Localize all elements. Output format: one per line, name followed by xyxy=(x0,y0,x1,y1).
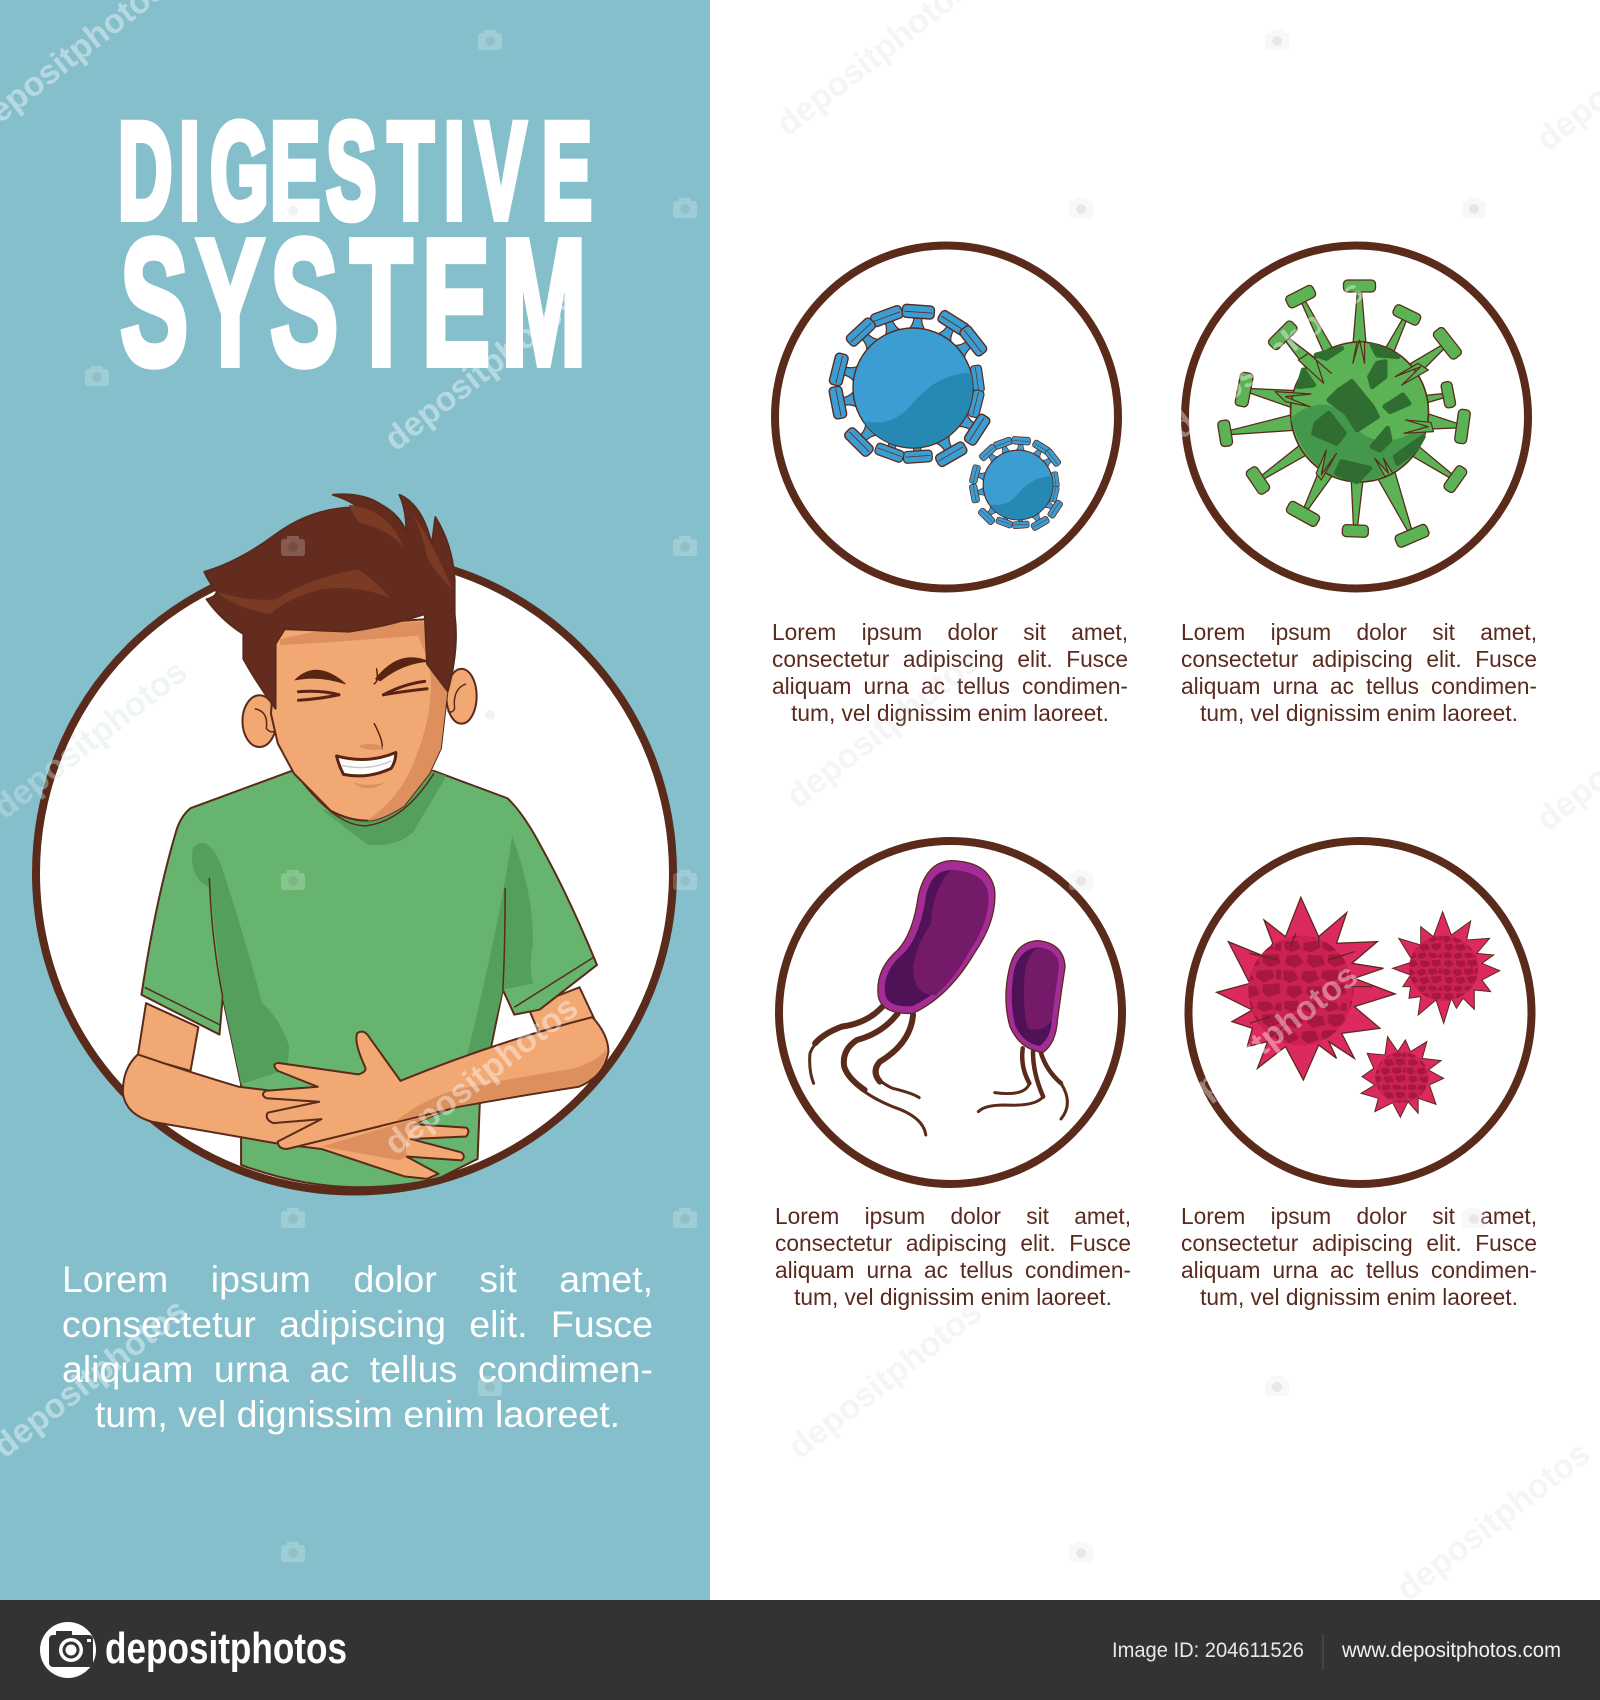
text block: purple bacteria: aliquam urna ac tellus condimen- xyxy=(775,1257,1131,1283)
illustration: man with stomach ache in circle xyxy=(36,494,673,1192)
shirt shadows xyxy=(192,771,534,1087)
icon: flagella xyxy=(810,1007,1067,1135)
lower hand shading xyxy=(321,1108,452,1160)
right arm with upper hand xyxy=(263,1017,608,1149)
text block: main lorem ipsum: tum, vel dignissim enim laoreet. xyxy=(95,1393,620,1435)
watermark overlay: depositphotos xyxy=(1163,272,1371,446)
title: digestive system: SYSTEM xyxy=(120,202,587,404)
watermark overlay: depositphotos xyxy=(779,641,987,815)
watermark overlay: depositphotos xyxy=(1157,956,1365,1130)
text block: purple bacteria xyxy=(775,1203,1131,1310)
icon: footer logo camera xyxy=(40,1622,96,1678)
icon: large red virus xyxy=(1217,897,1395,1080)
watermark cameras on white xyxy=(1069,30,1486,1562)
arm shading xyxy=(395,1049,607,1122)
text block: red virus: consectetur adipiscing elit. Fusce xyxy=(1181,1230,1537,1256)
text block: blue virus: aliquam urna ac tellus condimen- xyxy=(772,673,1128,699)
teeth xyxy=(337,752,396,776)
watermark overlay: depositphotos xyxy=(377,284,585,458)
text block: purple bacteria: consectetur adipiscing elit. Fusce xyxy=(775,1230,1131,1256)
panel: red virus circle xyxy=(1188,841,1532,1184)
icon: medium red virus xyxy=(1393,912,1500,1023)
title: digestive system xyxy=(118,95,592,404)
text block: red virus: tum, vel dignissim enim laoreet. xyxy=(1200,1284,1518,1310)
icon: large bacterium xyxy=(878,861,995,1013)
left arm with lower hand xyxy=(123,1054,468,1179)
hair xyxy=(204,494,456,709)
upper arms xyxy=(138,987,595,1071)
icon: large blue virus xyxy=(828,304,991,468)
figure xyxy=(123,494,608,1187)
large virus spike lines xyxy=(1250,933,1372,1037)
text block: green virus: Lorem ipsum dolor sit amet, xyxy=(1181,619,1537,645)
text block: main lorem ipsum xyxy=(62,1258,653,1435)
icon: small red virus xyxy=(1361,1037,1444,1117)
icon: small blue virus xyxy=(969,436,1063,531)
text block: red virus: aliquam urna ac tellus condimen- xyxy=(1181,1257,1537,1283)
nose shadow and chin xyxy=(358,744,383,750)
footer image id: Image ID: 204611526 xyxy=(1112,1638,1304,1662)
circle behind man xyxy=(36,554,673,1192)
text block: main lorem ipsum: consectetur adipiscing elit. Fusce xyxy=(62,1303,653,1345)
watermark overlay: depositphotos xyxy=(781,1292,989,1466)
title: digestive system: DIGESTIVE xyxy=(118,95,592,248)
text block: blue virus: consectetur adipiscing elit. Fusce xyxy=(772,646,1128,672)
panel: green virus circle xyxy=(1185,246,1528,588)
text block: green virus xyxy=(1181,619,1537,726)
virus blotches xyxy=(1298,345,1423,482)
footer logo wordmark: depositphotos xyxy=(105,1624,347,1673)
virus spike roots over body xyxy=(1275,340,1433,480)
text block: main lorem ipsum: aliquam urna ac tellus condimen- xyxy=(62,1348,653,1390)
sleeve seams xyxy=(145,773,593,1025)
watermark overlay: depositphotos xyxy=(377,988,585,1162)
icon: small bacterium xyxy=(1006,941,1065,1052)
face shading xyxy=(367,619,448,821)
text block: purple bacteria: tum, vel dignissim enim laoreet. xyxy=(794,1284,1112,1310)
face xyxy=(271,619,448,821)
icon: green virus xyxy=(1217,280,1471,548)
footer website: www.depositphotos.com xyxy=(1341,1638,1561,1662)
hair highlights xyxy=(216,505,452,614)
green shirt xyxy=(141,771,597,1187)
text block: purple bacteria: Lorem ipsum dolor sit amet, xyxy=(775,1203,1131,1229)
footer bar xyxy=(0,1600,1600,1700)
text block: green virus: aliquam urna ac tellus condimen- xyxy=(1181,673,1537,699)
panel: blue left column xyxy=(0,0,710,1600)
ears xyxy=(242,669,477,747)
text block: main lorem ipsum: Lorem ipsum dolor sit amet, xyxy=(62,1258,653,1300)
text block: blue virus: tum, vel dignissim enim laoreet. xyxy=(791,700,1109,726)
text block: red virus: Lorem ipsum dolor sit amet, xyxy=(1181,1203,1537,1229)
text block: blue virus xyxy=(772,619,1128,726)
text block: red virus xyxy=(1181,1203,1537,1310)
text block: green virus: consectetur adipiscing elit. Fusce xyxy=(1181,646,1537,672)
watermark cameras on blue xyxy=(85,30,697,1562)
text block: green virus: tum, vel dignissim enim laoreet. xyxy=(1200,700,1518,726)
panel: blue virus circle xyxy=(775,246,1118,588)
facial features xyxy=(295,658,428,684)
panel: purple bacteria circle xyxy=(779,841,1122,1184)
text block: blue virus: Lorem ipsum dolor sit amet, xyxy=(772,619,1128,645)
